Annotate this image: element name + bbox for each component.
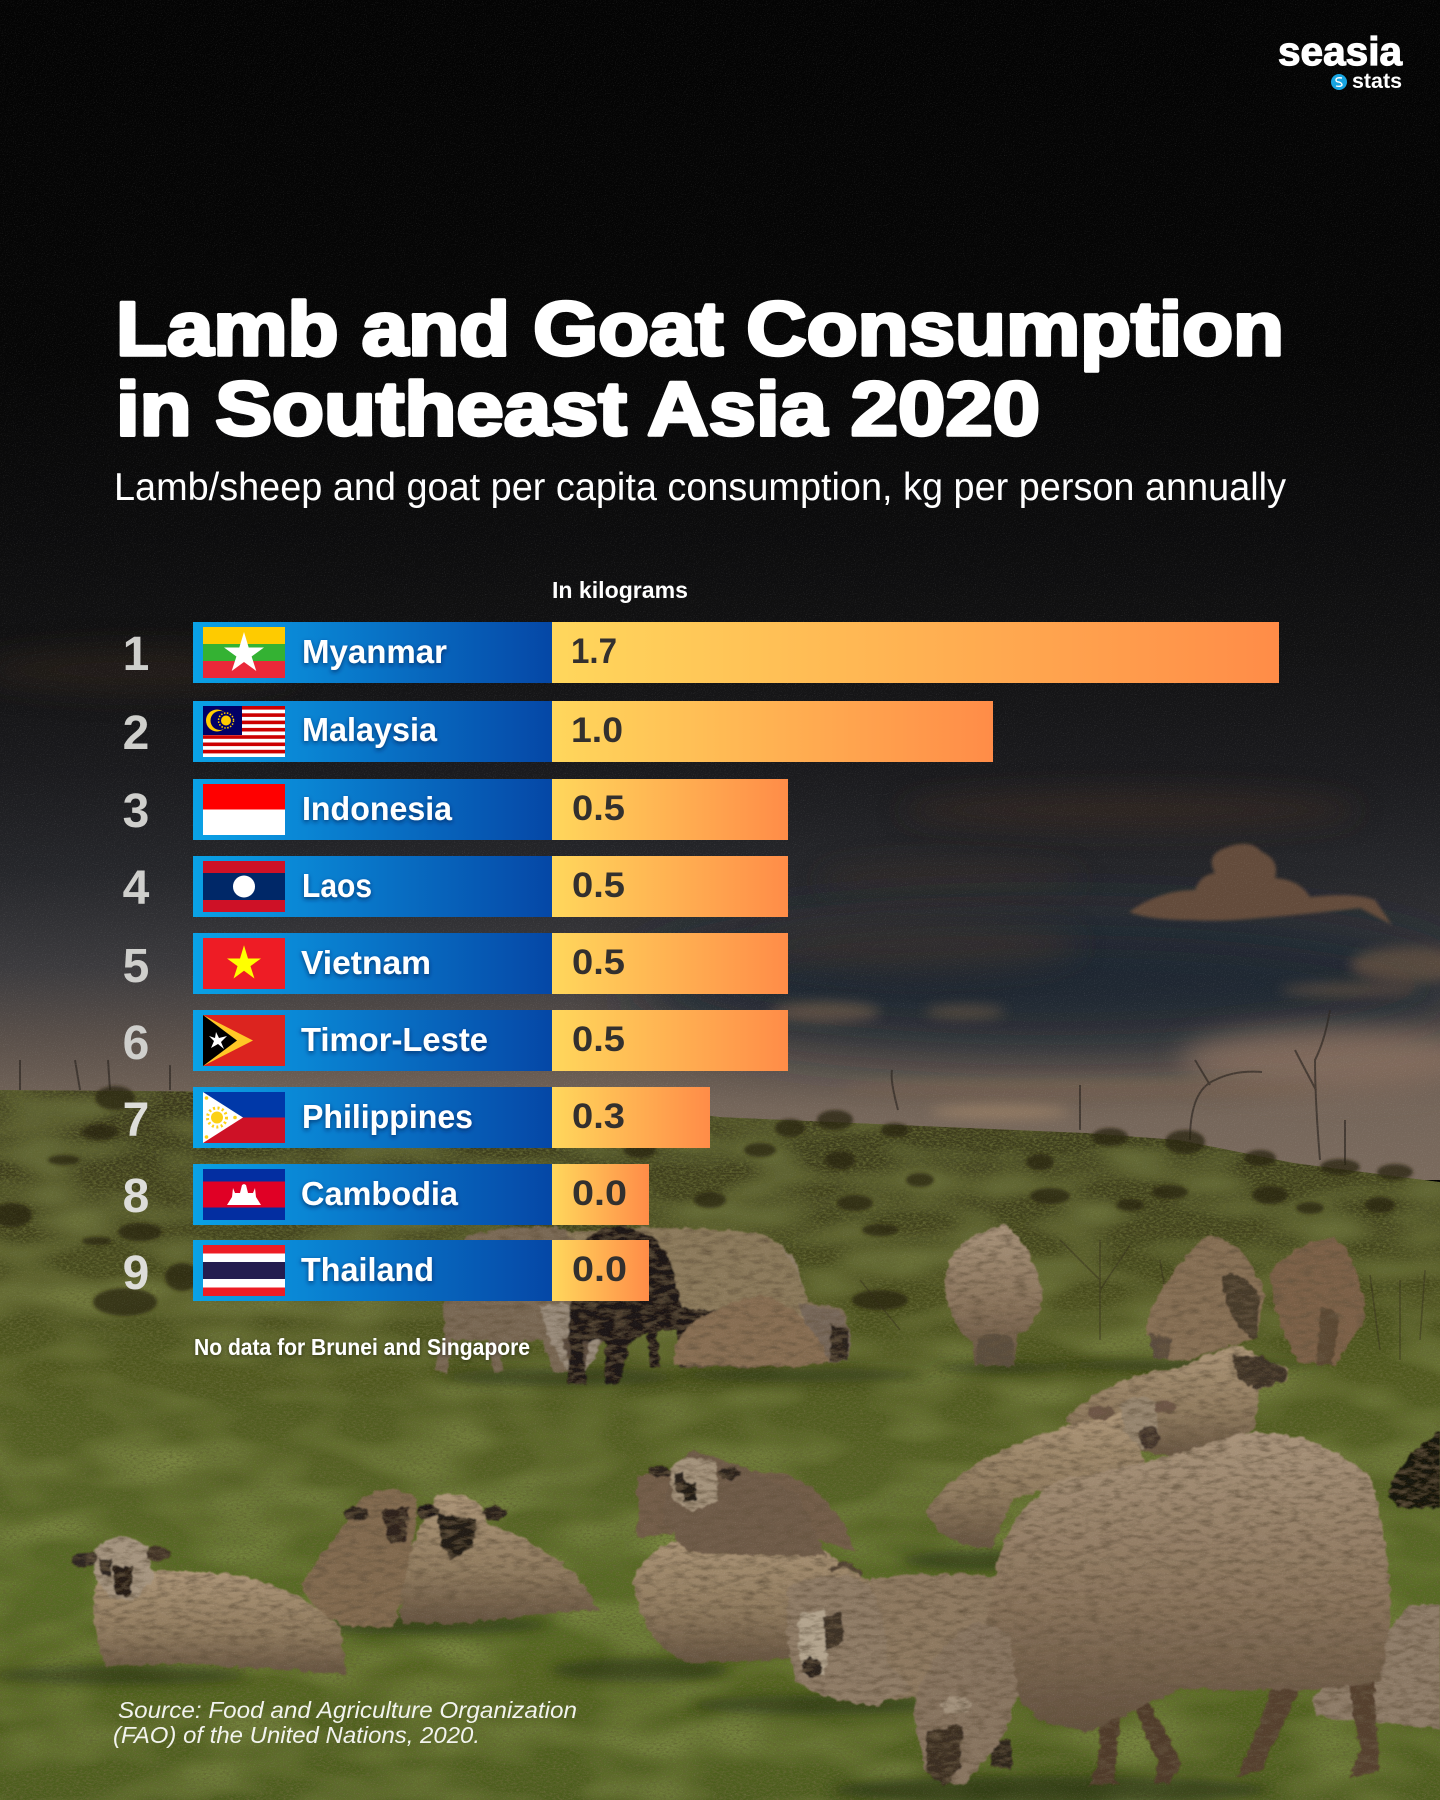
sheep: standing brown head	[663, 1450, 826, 1557]
row 3 Indonesia	[123, 779, 788, 840]
flag: Vietnam	[203, 938, 285, 989]
title	[116, 287, 1284, 452]
flag: Timor-Leste	[203, 1015, 285, 1066]
row 9 Thailand: 0.0	[572, 1250, 627, 1289]
row 1 Myanmar	[123, 622, 1279, 683]
row 6 Timor-Leste: 0.5	[572, 1020, 625, 1059]
row 1 Myanmar: Myanmar	[302, 633, 447, 670]
flag: Indonesia	[203, 784, 285, 835]
row 4 Laos	[123, 856, 788, 917]
row 5 Vietnam	[123, 933, 788, 994]
source	[113, 1697, 577, 1748]
row 4 Laos: 0.5	[572, 866, 625, 905]
hill and grass	[0, 1090, 1440, 1800]
logo	[1278, 30, 1403, 93]
bare shrubs on the horizon	[20, 1010, 1345, 1165]
sheep: lying with horns	[839, 1574, 995, 1701]
row 2 Malaysia: Malaysia	[302, 711, 438, 748]
flag: Laos	[203, 861, 285, 912]
row 9 Thailand: Thailand	[301, 1251, 434, 1288]
sky clouds	[0, 648, 1440, 1119]
row 2 Malaysia: 1.0	[571, 711, 623, 750]
sheep: pair, right one	[399, 1494, 599, 1623]
row 7 Philippines: Philippines	[302, 1098, 473, 1135]
sheep: large foreground	[913, 1432, 1390, 1786]
row 3 Indonesia: 3	[123, 785, 149, 838]
sheep: upper centre grazing	[945, 1225, 1044, 1366]
row 4 Laos: Laos	[302, 867, 372, 904]
row 8 Cambodia	[123, 1164, 649, 1225]
axis label: In kilograms	[552, 577, 688, 603]
row 5 Vietnam: Vietnam	[301, 944, 431, 981]
row 6 Timor-Leste: 6	[123, 1017, 149, 1070]
row 3 Indonesia: 0.5	[572, 789, 625, 828]
row 4 Laos: 4	[123, 862, 150, 915]
logo: stats	[1352, 70, 1402, 93]
note: no data: No data for Brunei and Singapore	[194, 1334, 530, 1360]
sheep: pair, left one	[301, 1489, 418, 1627]
title: in Southeast Asia 2020	[116, 367, 1040, 452]
sheep shadows	[0, 1359, 1320, 1800]
sheep: upper left cluster	[564, 1228, 830, 1315]
bar chart	[123, 622, 1279, 1301]
title: Lamb and Goat Consumption	[116, 287, 1284, 372]
row 1 Myanmar: 1.7	[571, 632, 617, 671]
row 3 Indonesia: Indonesia	[302, 790, 453, 827]
molehills	[0, 1086, 1413, 1316]
row 6 Timor-Leste: Timor-Leste	[301, 1021, 488, 1058]
sheep: front lying brown	[637, 1471, 855, 1552]
row 2 Malaysia: 2	[123, 707, 149, 760]
row 5 Vietnam: 0.5	[572, 943, 625, 982]
row 7 Philippines: 0.3	[572, 1097, 625, 1136]
sheep: left lying	[94, 1570, 347, 1675]
logo icon	[1331, 74, 1347, 90]
row 8 Cambodia: 8	[123, 1170, 149, 1223]
row 6 Timor-Leste	[123, 1010, 788, 1071]
row 5 Vietnam: 5	[123, 940, 149, 993]
flag: Malaysia	[203, 706, 285, 757]
row 2 Malaysia	[123, 701, 993, 762]
sheep: black and tan	[667, 1232, 810, 1307]
flag: Thailand	[203, 1245, 285, 1296]
row 8 Cambodia: 0.0	[572, 1174, 627, 1213]
row 9 Thailand	[123, 1240, 649, 1301]
row 7 Philippines: 7	[123, 1094, 149, 1147]
row 1 Myanmar: 1	[123, 628, 149, 681]
sheep: upper right pair	[1145, 1236, 1264, 1361]
sheep: front large lying	[633, 1531, 913, 1663]
flag: Cambodia	[203, 1169, 285, 1220]
row 9 Thailand: 9	[123, 1247, 149, 1300]
sheep: behind the bars	[435, 1227, 850, 1373]
source: Source: Food and Agriculture Organization	[118, 1697, 577, 1723]
subtitle: Lamb/sheep and goat per capita consumption, kg per person annually	[114, 466, 1286, 509]
source: (FAO) of the United Nations, 2020.	[113, 1722, 480, 1748]
logo: seasia	[1278, 30, 1403, 74]
flock of sheep	[72, 1225, 1440, 1786]
sheep: lying, looking at the viewer	[927, 1412, 1147, 1548]
sheep: far right	[1312, 1606, 1440, 1732]
row 7 Philippines	[123, 1087, 710, 1148]
sheep: behind, head facing right	[1064, 1345, 1287, 1456]
flag: Myanmar	[203, 627, 285, 678]
shrubs in the pasture	[860, 1240, 1425, 1360]
flag: Philippines	[203, 1092, 285, 1143]
sheep: lying with head down	[800, 1303, 850, 1362]
row 8 Cambodia: Cambodia	[301, 1175, 459, 1212]
